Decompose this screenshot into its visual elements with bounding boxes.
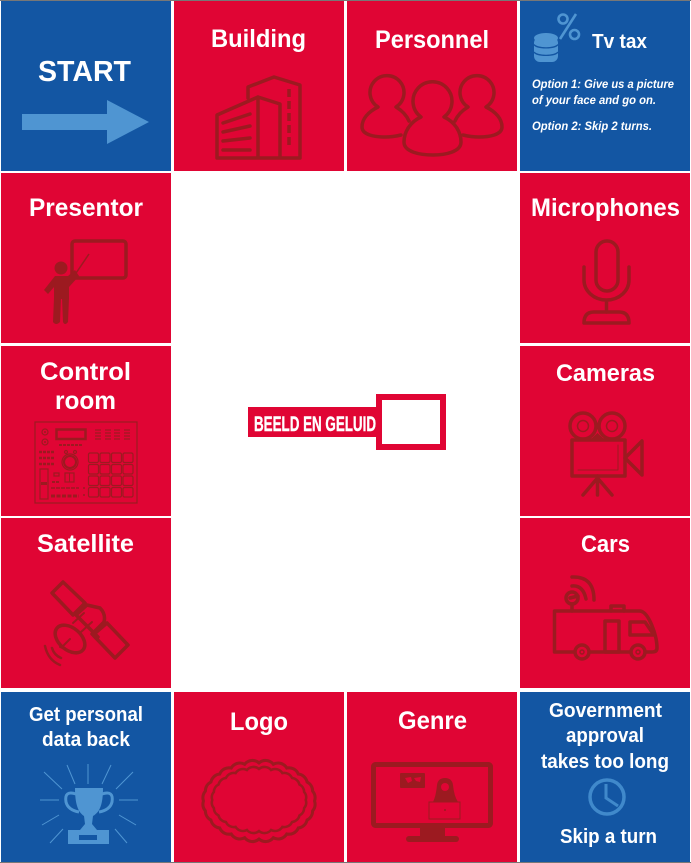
icon: satellite — [45, 582, 128, 665]
panel: presentor — [1, 173, 171, 343]
panel: start — [1, 1, 171, 171]
icon: broadcast van — [554, 577, 657, 659]
heading: start: START — [38, 56, 131, 88]
heading: get personal data back: Get personal — [29, 704, 143, 726]
icon: clock — [590, 780, 624, 814]
panel: personnel — [347, 1, 517, 171]
icon: trophy — [40, 764, 138, 844]
text: options: of your face and go on. — [532, 93, 656, 107]
heading: control room: Control — [40, 358, 131, 386]
heading: get personal data back — [29, 704, 143, 751]
text: skip a turn: Skip a turn — [560, 826, 657, 848]
icon: monitor with news presenter — [374, 764, 490, 842]
heading: government approval: takes too long — [541, 751, 669, 773]
text: options — [532, 77, 674, 133]
heading: satellite: Satellite — [37, 530, 134, 558]
heading: government approval: approval — [566, 725, 644, 747]
text: options: Option 2: Skip 2 turns. — [532, 119, 652, 133]
panel: cameras — [520, 346, 690, 516]
heading: control room — [40, 358, 131, 415]
icon: microphone — [584, 241, 629, 323]
panel: building — [174, 1, 344, 171]
heading: logo: Logo — [230, 708, 288, 736]
heading: tv tax: Tv tax — [592, 31, 647, 53]
heading: microphones: Microphones — [531, 194, 680, 222]
panel: genre — [347, 692, 517, 862]
heading: get personal data back: data back — [42, 729, 131, 751]
panel: government approval — [520, 692, 690, 862]
heading: government approval — [541, 700, 669, 773]
panel: logo — [174, 692, 344, 862]
heading: building: Building — [211, 25, 306, 53]
center logo: Beeld en Geluid — [248, 397, 443, 447]
heading: cameras: Cameras — [556, 360, 655, 387]
icon: mixing console — [35, 422, 137, 503]
arrow: start direction — [22, 100, 149, 144]
panel: control room — [1, 346, 171, 516]
heading: government approval: Government — [549, 700, 662, 722]
heading: control room: room — [55, 387, 116, 415]
panel: microphones — [520, 173, 690, 343]
heading: cars: Cars — [581, 531, 630, 558]
heading: genre: Genre — [398, 707, 467, 735]
heading: personnel: Personnel — [375, 26, 489, 54]
panel: satellite — [1, 518, 171, 688]
icon: presenter at board — [44, 241, 126, 324]
panel: tv tax — [520, 1, 690, 171]
panel: get personal data back — [1, 692, 171, 862]
icon: film camera — [570, 413, 642, 495]
icon: coins and percent — [534, 14, 579, 62]
center logo: Beeld en Geluid: BEELD EN GELUID — [254, 413, 376, 436]
text: options: Option 1: Give us a picture — [532, 77, 674, 91]
panel: cars — [520, 518, 690, 688]
icon: building — [217, 77, 300, 158]
icon: wavy double oval — [203, 760, 315, 842]
icon: group of people — [362, 76, 502, 155]
heading: presentor: Presentor — [29, 194, 143, 222]
